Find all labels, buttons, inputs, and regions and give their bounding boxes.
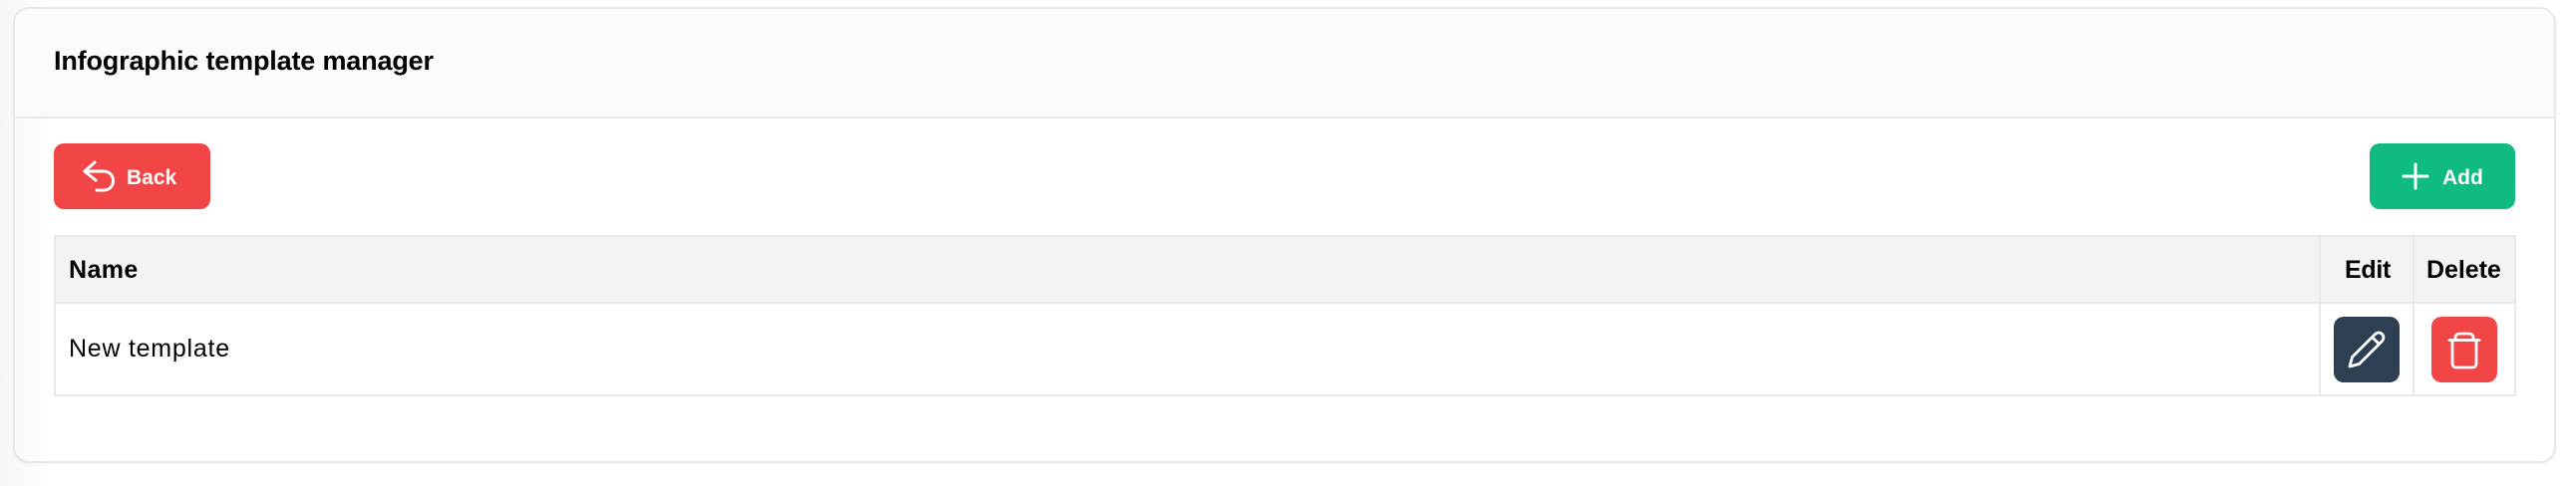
title: Infographic template manager [54,46,434,76]
button label: add: Add [2442,166,2483,189]
button: back [54,143,210,209]
button: add [2370,143,2515,209]
column heading: delete: Delete [2426,256,2501,284]
button label: back: Back [127,166,176,189]
icon: back arrow [83,160,115,191]
button: delete [2431,317,2497,382]
table: templates [54,235,2516,396]
icon: pencil [2349,331,2385,368]
icon: trash can [2448,333,2480,368]
table cell: template name: New template [69,335,230,363]
panel header [15,9,2554,119]
icon: plus [2403,163,2428,189]
button: edit [2334,317,2400,382]
column heading: name: Name [69,256,139,284]
left page shading [0,0,50,486]
column heading: edit: Edit [2345,256,2391,284]
table header row [56,237,2514,304]
